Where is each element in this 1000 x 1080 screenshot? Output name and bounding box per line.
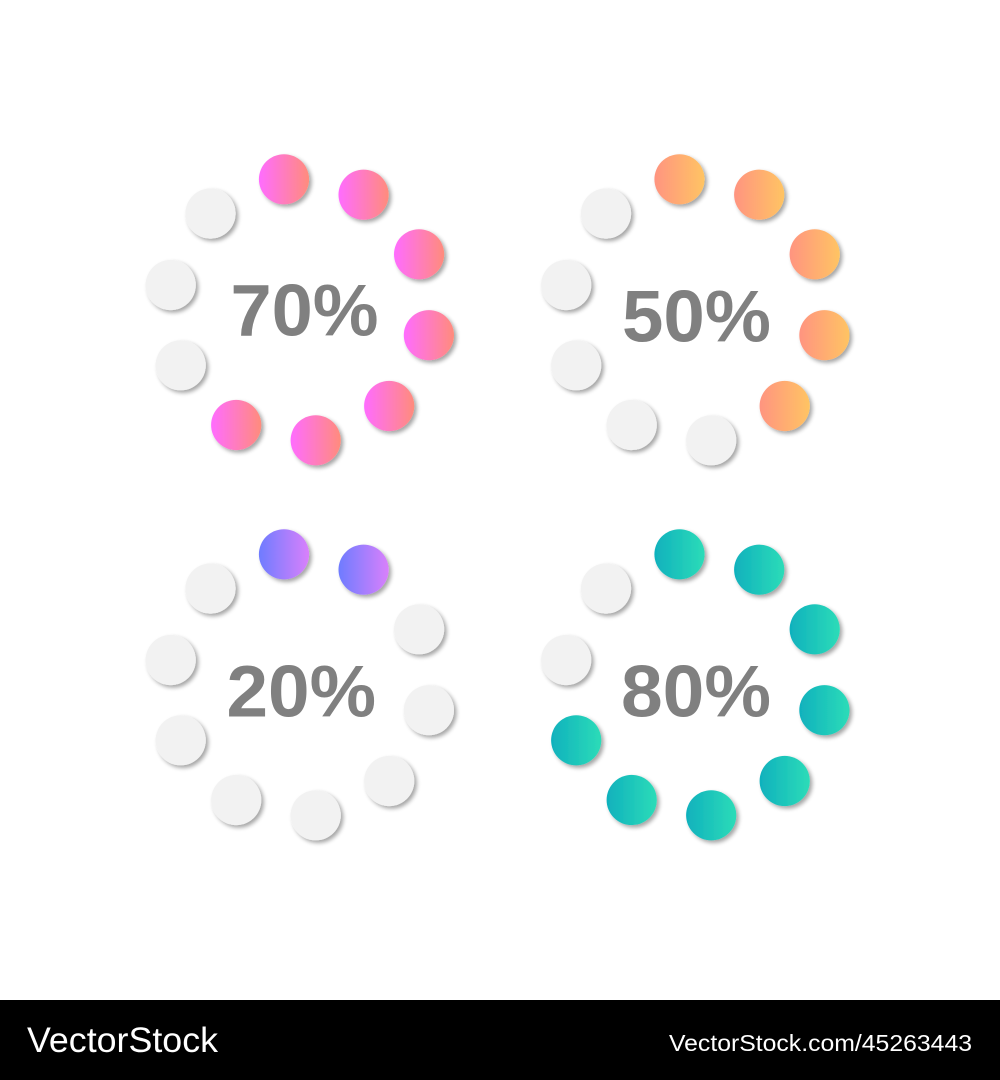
label: 80%: 80% xyxy=(621,652,771,733)
panel: 70% loader xyxy=(146,154,454,465)
panel: 50% loader xyxy=(541,154,850,465)
empty dots: 5 grey xyxy=(541,188,736,465)
panel: 80% loader xyxy=(541,529,850,840)
label: 20%: 20% xyxy=(226,652,376,733)
label: 70%: 70% xyxy=(230,271,378,352)
watermark bar xyxy=(0,1000,1000,1080)
filled dots: 8 teal xyxy=(551,529,850,840)
empty dots: 2 grey xyxy=(541,563,631,685)
panel: 20% loader xyxy=(146,529,454,840)
watermark logo text: VectorStock xyxy=(27,1021,219,1060)
filled dots: 2 violet xyxy=(259,529,389,595)
filled dots: 5 orange xyxy=(654,154,850,431)
empty dots: 3 grey xyxy=(146,188,236,390)
empty dots: 8 grey xyxy=(146,563,454,840)
watermark id text: VectorStock.com/45263443 xyxy=(669,1030,972,1056)
label: 50%: 50% xyxy=(622,277,771,358)
filled dots: 7 pink xyxy=(211,154,454,465)
